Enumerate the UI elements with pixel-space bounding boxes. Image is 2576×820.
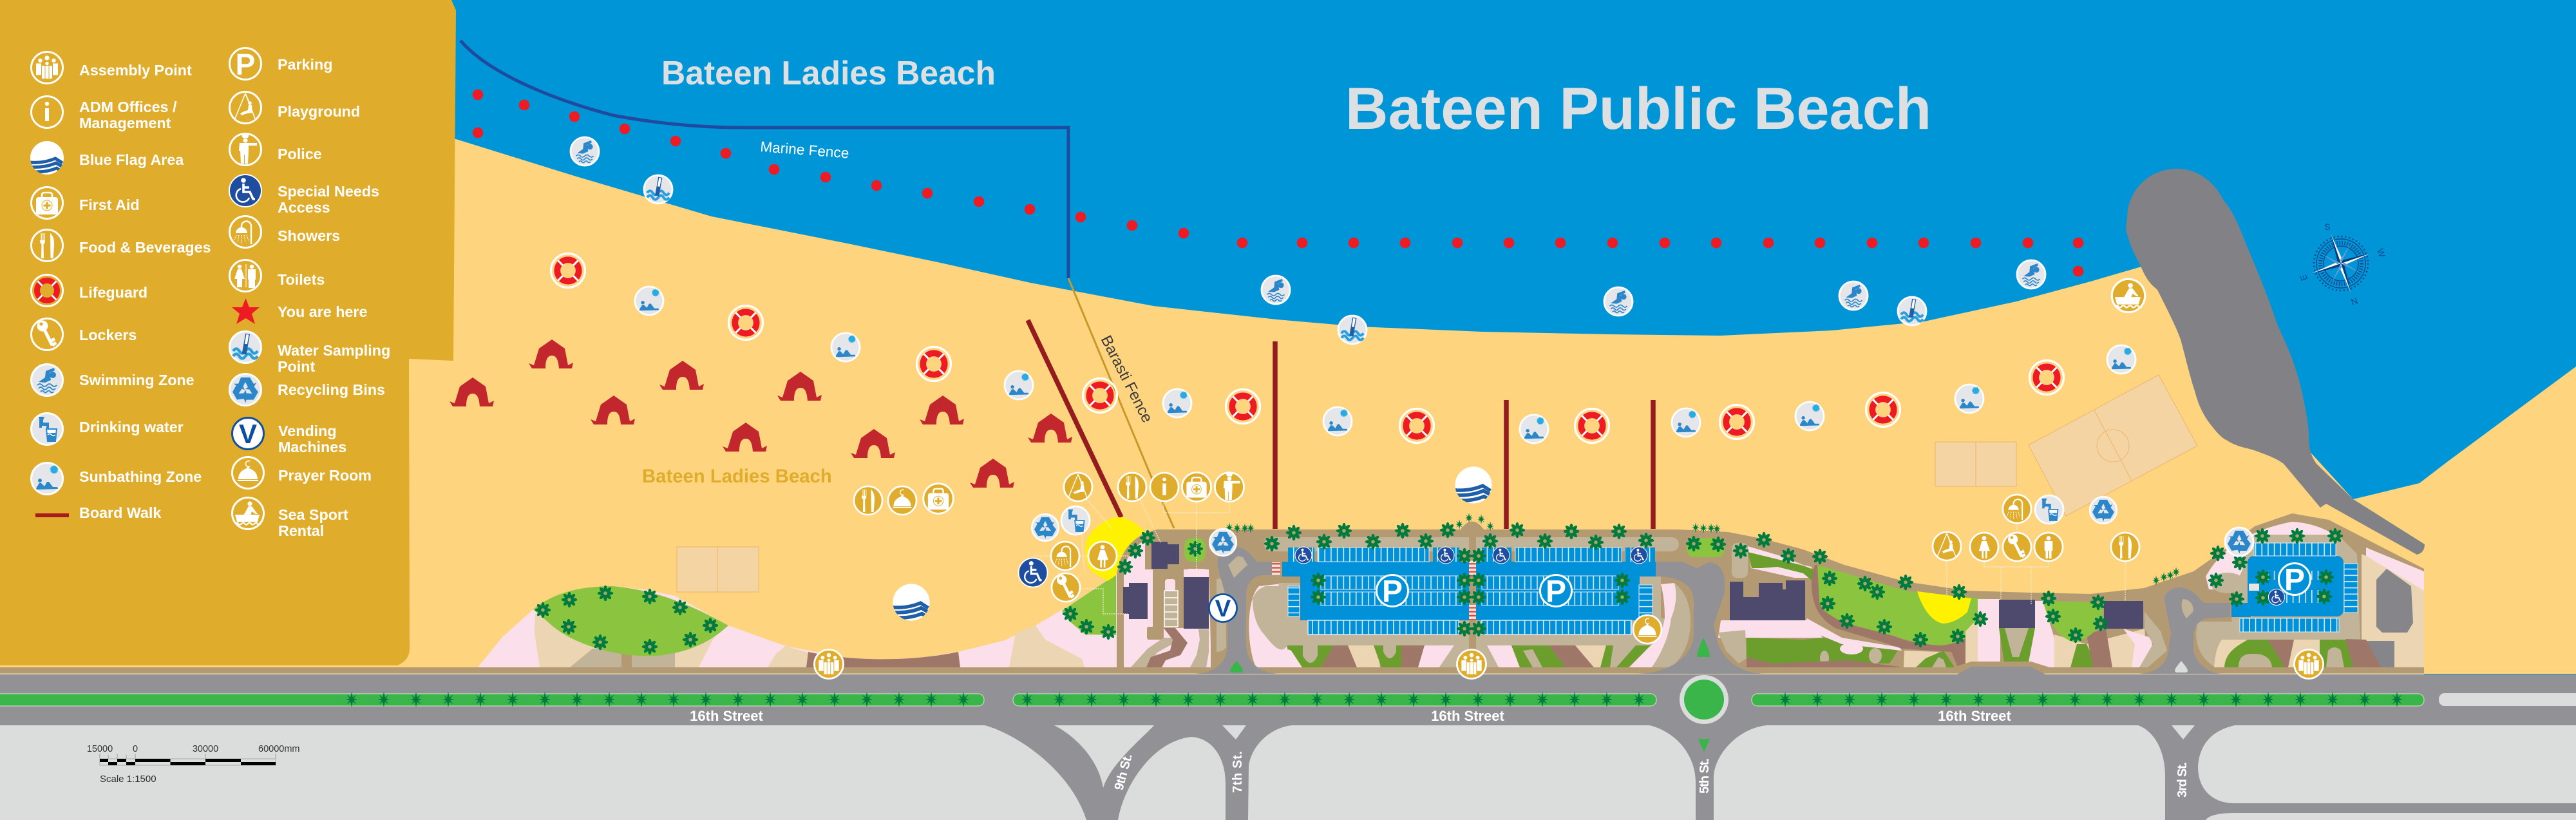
legend: right column labels: Showers [278, 227, 340, 244]
compass rose: N [2350, 296, 2359, 307]
central facilities [1019, 472, 1244, 602]
disabled access east [2268, 589, 2285, 605]
7th street island [1222, 725, 1246, 739]
access road: 3rd street [2140, 587, 2230, 674]
land palm trees [535, 522, 2343, 654]
east facilities [1933, 495, 2139, 561]
legend: right column labels: Police [278, 146, 322, 162]
16th street labels: 16th Street [690, 708, 764, 724]
yellow playground east [1917, 591, 1971, 624]
marine fence line [460, 41, 1068, 278]
central median east [1752, 694, 2424, 706]
loop island: 7th street [1228, 556, 1247, 578]
compass rose: W [2375, 247, 2388, 259]
legend: right column labels: Vending [278, 423, 337, 439]
legend: left column labels: Lifeguard [79, 284, 147, 301]
parking sign left [1377, 575, 1408, 609]
legend: right column labels: Access [278, 199, 330, 216]
sand beach [0, 139, 2576, 674]
parking sign right [1540, 575, 1571, 609]
side street labels [1112, 751, 2190, 797]
prayer room [1633, 615, 1662, 644]
legend: parking icon: P [236, 48, 255, 81]
9th street island [1054, 725, 1154, 788]
roundabout [1680, 675, 1728, 724]
swimming zones [571, 137, 2045, 316]
recycling by car parks [1209, 528, 2253, 556]
legend: right column labels: Machines [278, 439, 346, 455]
legend: right column labels: Toilets [278, 271, 325, 288]
facility icons [814, 466, 2324, 679]
scale bar: Scale 1:1500 [100, 774, 156, 785]
assembly points [814, 649, 2324, 679]
16th street labels: 16th Street [1431, 708, 1505, 724]
legend: you are here star [232, 298, 260, 324]
16th street road and side streets [0, 674, 2576, 820]
access road: 7th street [1193, 546, 1278, 674]
traffic islands [1230, 638, 2188, 752]
parking sign right: P [1546, 575, 1566, 609]
sunbathing zones [635, 287, 2136, 443]
harbour jetty [2126, 169, 2425, 555]
legend: left column labels [79, 62, 211, 521]
legend: left column labels: First Aid [79, 196, 140, 213]
panel: legend [0, 0, 456, 665]
south ground [0, 725, 2576, 820]
parking sign left: P [1382, 575, 1403, 609]
16th street labels [690, 708, 2012, 724]
block: east car park surrounds [2196, 522, 2424, 669]
legend: left column labels: Sunbathing Zone [79, 468, 202, 485]
land base west: pink garden [478, 573, 1118, 667]
title: Bateen Public Beach: Bateen Public Beach [1345, 76, 1931, 142]
blue flags [891, 466, 1492, 621]
boardwalks [1028, 320, 1653, 529]
access road: 5th street [1636, 562, 1765, 674]
legend: left column labels: ADM Offices / [79, 99, 177, 115]
scale bar [87, 744, 299, 785]
3rd street island [2172, 725, 2195, 739]
legend: left column labels: Lockers [79, 327, 137, 343]
legend: left column labels: Board Walk [79, 504, 161, 521]
small palm clusters [1226, 513, 2180, 586]
parking sign east: P [2284, 563, 2305, 597]
legend: parking icon [229, 48, 261, 81]
sea sport rental [2112, 279, 2145, 312]
legend background [0, 0, 456, 665]
legend: right column labels [278, 56, 390, 539]
bottom promenade strip [0, 667, 2424, 674]
yellow playground west [1085, 517, 1144, 581]
legend: left column labels: Assembly Point [79, 62, 192, 79]
sea and sand icons [551, 137, 2145, 443]
side street labels: 3rd St. [2175, 762, 2190, 797]
legend: right column labels: You are here [278, 303, 367, 320]
barasti fence label: Barasti Fence [1097, 332, 1156, 426]
scale bar: 60000mm [258, 744, 299, 754]
median palm trees [346, 692, 2403, 707]
legend: right column labels: Recycling Bins [278, 381, 385, 398]
tents on ladies beach [450, 339, 1072, 488]
legend: right column icons [229, 91, 264, 529]
legend: right column labels: Parking [278, 56, 332, 73]
block: 7th street facilities [1123, 538, 1226, 667]
lifeguard stations [551, 254, 2063, 443]
legend: right column labels: Sea Sport [278, 506, 348, 523]
legend: left column labels: Food & Beverages [79, 239, 211, 256]
legend: board walk swatch [35, 513, 69, 517]
red marker buoys [473, 90, 2083, 276]
legend: left column labels: Swimming Zone [79, 372, 194, 388]
facility leader lines [1034, 499, 2125, 614]
legend: right column labels: Playground [278, 103, 360, 120]
compass rose: S [2324, 222, 2331, 232]
scale bar: 15000 [87, 744, 113, 754]
side street labels: 9th St. [1112, 752, 1135, 792]
east road end [2439, 693, 2576, 706]
side street labels: 5th St. [1698, 758, 1712, 794]
beach courts [677, 375, 2197, 592]
water sampling points [644, 175, 1926, 344]
block: garden east of 5th street [1687, 538, 2167, 667]
loop island: 3rd street [2182, 599, 2193, 618]
compass rose [2298, 222, 2388, 307]
legend: right column labels: Water Sampling [278, 342, 390, 359]
scale bar: 0 [133, 744, 138, 754]
title: Bateen Ladies Beach on water: Bateen Ladies Beach [661, 54, 996, 91]
car park: central [1272, 537, 1667, 667]
legend: right column labels: Prayer Room [278, 467, 372, 484]
parking sign east [2278, 563, 2311, 597]
legend: left column labels: Drinking water [79, 419, 184, 435]
legend: right column labels: Point [278, 358, 315, 375]
16th street labels: 16th Street [1938, 708, 2012, 724]
block: central car park surrounds [1249, 537, 1690, 667]
pitch centre circle [2097, 430, 2129, 462]
legend: left column labels: Blue Flag Area [79, 151, 184, 168]
ladies beach facilities [854, 484, 953, 515]
lay-by on 16th street [1945, 662, 2058, 670]
barasti fence line [1068, 278, 1174, 528]
west garden beds [533, 575, 1116, 667]
disabled parking bays [1295, 547, 1647, 564]
car park: east [2219, 543, 2358, 632]
legend: left column icons [29, 52, 64, 495]
football pitch [2029, 375, 2197, 516]
compass rose: E [2298, 273, 2309, 282]
marine fence label: Marine Fence [760, 138, 849, 162]
central median west [0, 694, 984, 706]
land base: paved promenade [1117, 513, 2424, 667]
legend: right column labels: Special Needs [278, 183, 379, 200]
vending machine [1209, 594, 1237, 622]
scale bar: 30000 [193, 744, 218, 754]
side street labels: 7th St. [1231, 751, 1245, 793]
volleyball court east [1935, 442, 2016, 486]
legend: left column labels: Management [79, 115, 171, 131]
legend: right column labels: Rental [278, 522, 324, 539]
volleyball court west [677, 547, 759, 592]
label: Bateen Ladies Beach on sand: Bateen Ladies Beach [642, 466, 832, 487]
lay-by pavement [1957, 667, 2045, 674]
central median centre [1013, 694, 1656, 706]
